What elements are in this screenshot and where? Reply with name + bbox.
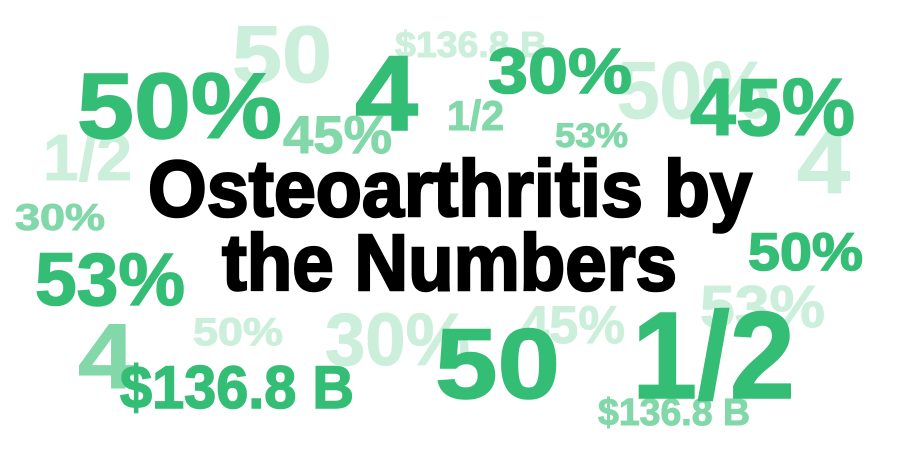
title [148,144,752,307]
background numbers: light: 4 [797,113,850,212]
background numbers: light: $136.8 B [395,24,547,65]
background numbers: dark [35,33,863,425]
background numbers: light: 1/2 [43,121,132,194]
background numbers: dark: $136.8 B [120,354,354,421]
background numbers: medium: 53% [555,117,628,155]
background numbers: light: 45% [520,296,625,355]
background numbers: dark: 53% [35,238,185,321]
background numbers: light: 30% [325,298,470,381]
title: the Numbers [222,218,677,307]
background numbers: medium [15,92,750,434]
background numbers: dark: 50% [77,54,282,158]
background numbers: light: 50 [232,10,332,100]
background numbers: medium: 4 [78,306,135,408]
background numbers: light: 50% [193,311,283,354]
background numbers: dark: 4 [355,33,418,153]
background numbers: dark: 30% [488,35,632,107]
background numbers: dark: 50 [435,308,560,419]
background numbers: medium: 1/2 [447,92,504,139]
background numbers: medium: 30% [15,197,105,238]
background numbers: dark: 1/2 [632,288,795,425]
background numbers: light: 50% [617,46,770,136]
background numbers: light [43,10,850,381]
background numbers: dark: 50% [748,223,863,282]
background numbers: dark: 45% [690,63,855,153]
background numbers: medium: 45% [283,106,392,165]
title: Osteoarthritis by [148,144,752,233]
background numbers: medium: $136.8 B [598,392,750,434]
background numbers: light: 53% [700,274,825,340]
